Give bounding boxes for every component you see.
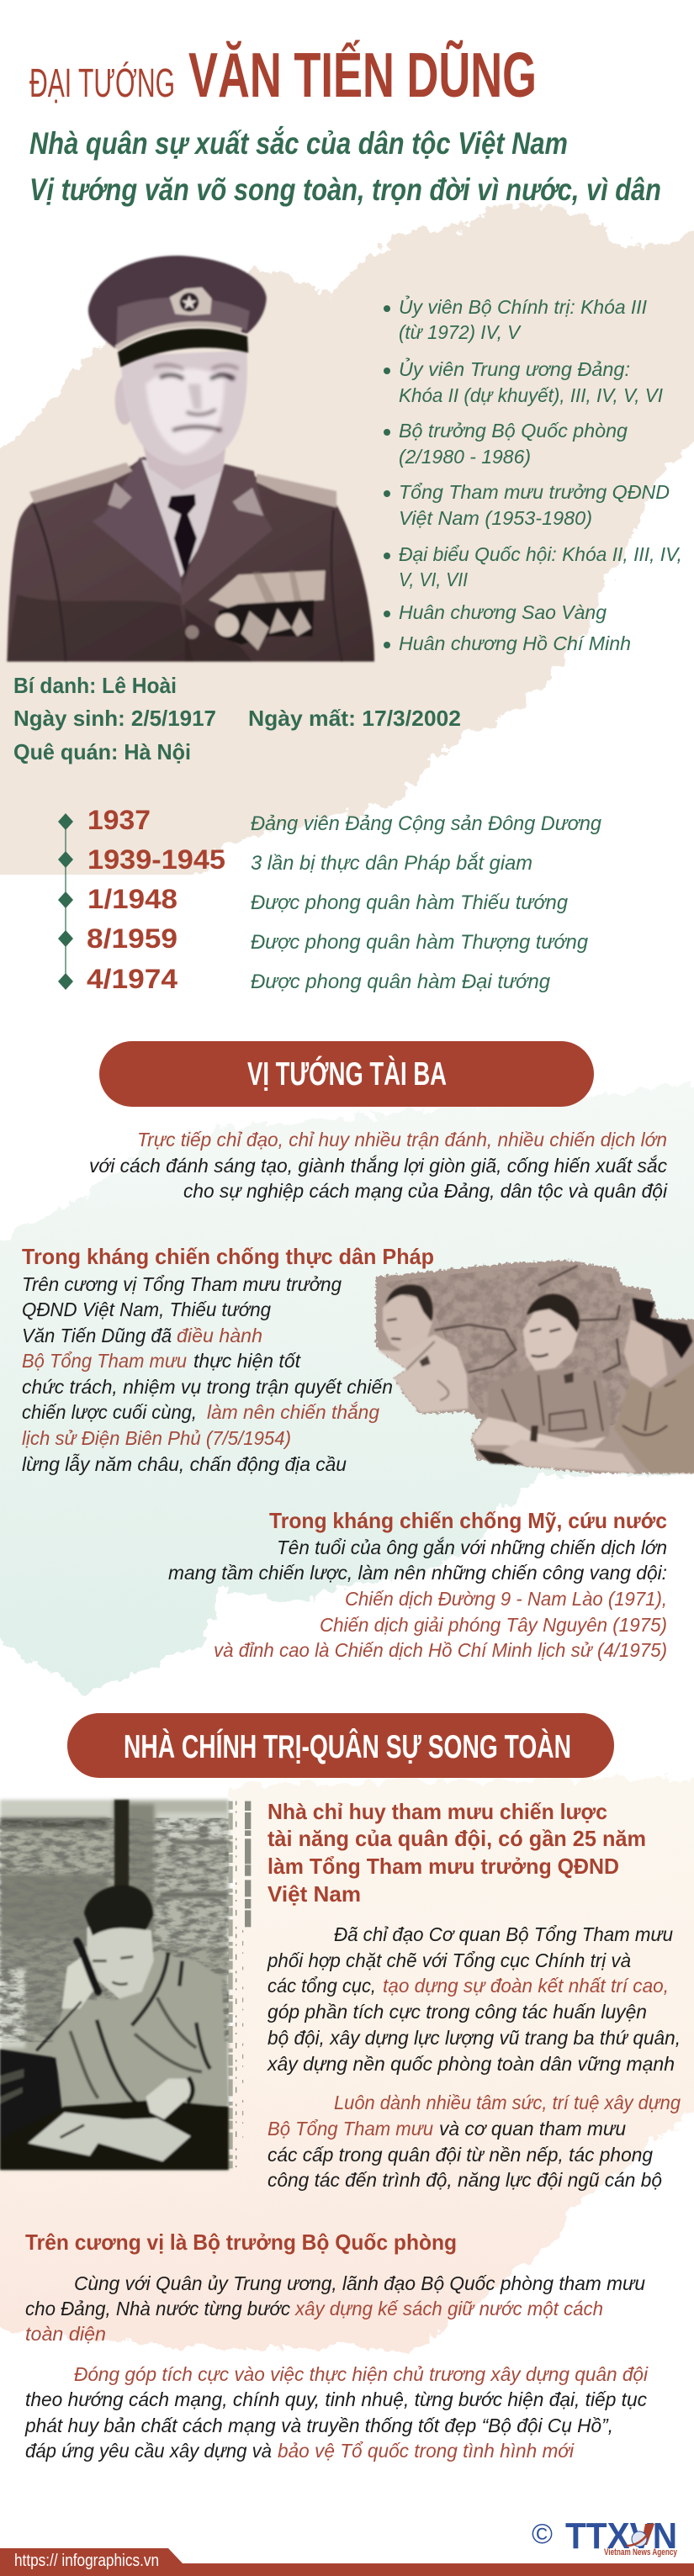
- medals: [219, 600, 314, 645]
- text block: resistance against the French: chức trách, nhiệm vụ trong trận quyết chiến: [22, 1376, 393, 1398]
- text block: Chief of General Staff: phối hợp chặt chẽ với Tổng cục Chính trị và: [267, 1949, 631, 1971]
- timeline item: 1/1948: [58, 884, 569, 914]
- map texture: [381, 1266, 650, 1426]
- personal information: Ngày mất: 17/3/2002: [248, 706, 461, 731]
- text block: Chief of General Staff: góp phần tích cực trong công tác huấn luyện: [268, 2001, 647, 2023]
- subtitle: [29, 125, 661, 207]
- writing hand: [146, 2079, 193, 2119]
- footer bar: [0, 2548, 694, 2576]
- intro paragraph: cho sự nghiệp cách mạng của Đảng, dân tộc và quân đội: [183, 1180, 668, 1202]
- text block: Minister of Defence: phát huy bản chất cách mạng và truyền thống tốt đẹp “Bộ đội Cụ Hồ”,: [24, 2415, 613, 2436]
- timeline item: 1939-1945: 1939-1945: [87, 844, 225, 875]
- timeline item: 1937: Đảng viên Đảng Cộng sản Đông Dương: [251, 812, 602, 835]
- bullet: Central Committee: [384, 357, 664, 406]
- lapels: [93, 457, 183, 595]
- text block: Minister of Defence: bảo vệ Tổ quốc trong tình hình mới: [278, 2440, 575, 2462]
- bullet: Chief of General Staff: Tổng Tham mưu trưởng QĐND: [399, 481, 670, 503]
- title: [29, 40, 537, 110]
- text block: Minister of Defence: cho Đảng, Nhà nước từng bước: [25, 2298, 290, 2319]
- text block: resistance against the US: Tên tuổi của ông gắn với những chiến dịch lớn: [277, 1537, 667, 1558]
- timeline item: 1/1948: Được phong quân hàm Thiếu tướng: [251, 891, 569, 914]
- text block: Chief of General Staff: tạo dựng sự đoàn kết nhất trí cao,: [383, 1975, 669, 1997]
- bullet: Ho Chi Minh Order: Huân chương Hồ Chí Minh: [399, 632, 631, 654]
- section banner: Vị tướng tài ba: VỊ TƯỚNG TÀI BA: [247, 1055, 447, 1092]
- text block: Chief of General Staff: các cấp trong quân đội từ nền nếp, tác phong: [268, 2144, 653, 2166]
- bullet: Minister of Defence: [384, 420, 628, 468]
- collar badges: [108, 482, 132, 509]
- bullet: Politburo: [384, 294, 648, 343]
- heading: Trên cương vị là Bộ trưởng Bộ Quốc phòng: Trên cương vị là Bộ trưởng Bộ Quốc phòng: [25, 2230, 457, 2255]
- photo: three officers in front of a map: [376, 1260, 694, 1473]
- shirt: [50, 1953, 228, 2109]
- officer in the middle: [471, 1294, 637, 1473]
- timeline item: 4/1974: [58, 964, 551, 994]
- timeline item: 8/1959: [58, 923, 589, 954]
- tie: [167, 495, 197, 576]
- bullet: Chief of General Staff: Việt Nam (1953-1980): [399, 507, 592, 529]
- text block: resistance against the US: [168, 1508, 667, 1661]
- text block: Chief of General Staff: các tổng cục,: [268, 1975, 376, 1997]
- shirt: [141, 460, 223, 578]
- text block: resistance against the French: lừng lẫy năm châu, chấn động địa cầu: [22, 1452, 347, 1475]
- heading: Nhà chỉ huy tham mưu chiến lược: Nhà chỉ huy tham mưu chiến lược: [268, 1799, 607, 1824]
- timeline item: 1937: 1937: [87, 805, 151, 835]
- text block: resistance against the French: làm nên chiến thắng: [207, 1401, 379, 1423]
- bullet: Politburo: Ủy viên Bộ Chính trị: Khóa III: [399, 294, 648, 318]
- text block: Chief of General Staff: Đã chỉ đạo Cơ quan Bộ Tổng Tham mưu: [334, 1923, 673, 1945]
- personal information: [13, 673, 461, 764]
- text block: resistance against the French: chiến lược cuối cùng,: [22, 1401, 197, 1423]
- cap rope: [116, 325, 241, 348]
- face: [122, 351, 247, 465]
- text block: Minister of Defence: xây dựng kế sách giữ nước một cách: [294, 2298, 603, 2319]
- timeline item: 1937: [58, 805, 602, 835]
- bullet: Chief of General Staff: [384, 481, 670, 529]
- heading: Trong kháng chiến chống Mỹ, cứu nước: Trong kháng chiến chống Mỹ, cứu nước: [269, 1508, 667, 1533]
- cap emblem: [170, 288, 212, 315]
- eyes, nose, mouth: [154, 365, 238, 369]
- text block: resistance against the US: Chiến dịch giải phóng Tây Nguyên (1975): [320, 1614, 667, 1636]
- text block: Minister of Defence: Cùng với Quân ủy Trung ương, lãnh đạo Bộ Quốc phòng tham mưu: [74, 2272, 645, 2294]
- intro paragraph: Trực tiếp chỉ đạo, chỉ huy nhiều trận đánh, nhiều chiến dịch lớn: [137, 1129, 667, 1150]
- bullet: National Assembly: Đại biểu Quốc hội: Khóa II, III, IV,: [399, 543, 682, 565]
- neck: [140, 435, 227, 490]
- logo: TTXVN Vietnam News Agency: TTXVN: [565, 2515, 677, 2557]
- bullet: National Assembly: [384, 543, 682, 590]
- text block: Chief of General Staff: và cơ quan tham mưu: [439, 2118, 626, 2140]
- timeline: [58, 805, 602, 994]
- medals ribbons: [209, 570, 326, 611]
- text block: resistance against the French: điều hành: [177, 1325, 262, 1346]
- text block: Minister of Defence: theo hướng cách mạng, chính quy, tinh nhuệ, từng bước hiện đại, tiếp tục: [25, 2388, 647, 2410]
- personal information: Quê quán: Hà Nội: [13, 739, 191, 764]
- papers: [28, 2113, 191, 2161]
- list of positions and awards: [384, 294, 682, 654]
- face: [87, 1924, 154, 1999]
- bullet: Minister of Defence: (2/1980 - 1986): [399, 446, 531, 468]
- intro paragraph: với cách đánh sáng tạo, giành thắng lợi giòn giã, cống hiến xuất sắc: [89, 1155, 667, 1177]
- bullet: Central Committee: Khóa II (dự khuyết), III, IV, V, VI: [399, 384, 664, 406]
- heading: Trong kháng chiến chống thực dân Pháp: Trong kháng chiến chống thực dân Pháp: [22, 1244, 434, 1269]
- cap crown: [88, 256, 267, 348]
- timeline item: 4/1974: Được phong quân hàm Đại tướng: [251, 971, 551, 993]
- background: green torn area: [0, 1079, 694, 1690]
- torn edge speckles: [230, 1801, 248, 2168]
- text block: resistance against the French: QĐND Việt Nam, Thiếu tướng: [22, 1299, 271, 1320]
- photo: general on the telephone at his desk: [0, 1800, 248, 2170]
- text block: resistance against the US: mang tầm chiến lược, làm nên những chiến công vang dội:: [168, 1562, 667, 1584]
- intro paragraph: [89, 1129, 668, 1202]
- timeline item: 1939-1945: [58, 844, 532, 875]
- hand and receiver: [61, 1955, 97, 2008]
- text block: resistance against the French: Văn Tiến Dũng đã: [22, 1325, 172, 1346]
- title: name: VĂN TIẾN DŨNG: [188, 40, 537, 110]
- desk: [0, 2100, 229, 2170]
- radio box: [0, 2050, 62, 2140]
- heading: Nhà chỉ huy tham mưu chiến lược: làm Tổng Tham mưu trưởng QĐND: [268, 1854, 619, 1879]
- heading: Nhà chỉ huy tham mưu chiến lược: Việt Nam: [268, 1881, 361, 1907]
- text block: Chief of General Staff: Luôn dành nhiều tâm sức, trí tuệ xây dựng: [334, 2092, 681, 2113]
- subtitle: Nhà quân sự xuất sắc của dân tộc Việt Nam: [29, 125, 568, 161]
- cap visor: [118, 329, 248, 368]
- text block: Chief of General Staff: [267, 1799, 681, 2191]
- text block: Chief of General Staff: Bộ Tổng Tham mưu: [268, 2118, 433, 2140]
- text block: Minister of Defence: [24, 2230, 649, 2462]
- text block: Chief of General Staff: xây dựng nền quốc phòng toàn dân vững mạnh: [267, 2053, 675, 2075]
- heading: Nhà chỉ huy tham mưu chiến lược: tài năng của quân đội, có gần 25 năm: [268, 1826, 646, 1851]
- timeline item: 8/1959: 8/1959: [87, 923, 177, 954]
- text block: resistance against the French: lịch sử Điện Biên Phủ (7/5/1954): [22, 1427, 291, 1449]
- section banner: Vị tướng tài ba: [99, 1041, 594, 1107]
- text block: resistance against the French: Trên cương vị Tổng Tham mưu trưởng: [22, 1273, 342, 1295]
- text block: resistance against the US: và đỉnh cao là Chiến dịch Hồ Chí Minh lịch sử (4/1975): [214, 1639, 667, 1661]
- ear: [115, 377, 135, 425]
- text block: Chief of General Staff: bộ đội, xây dựng lực lượng vũ trang ba thứ quân,: [268, 2027, 681, 2049]
- text block: resistance against the US: Chiến dịch Đường 9 - Nam Lào (1971),: [345, 1588, 667, 1610]
- officer on the left: [377, 1285, 469, 1413]
- hair: [84, 1886, 153, 1936]
- background: cream and peach torn area: [0, 1776, 694, 2349]
- bullet: Gold Star Order: Huân chương Sao Vàng: [399, 601, 607, 623]
- logo: TTXVN Vietnam News Agency: ©: [532, 2518, 553, 2549]
- text block: Minister of Defence: đáp ứng yêu cầu xây dựng và: [25, 2440, 272, 2462]
- section banner: Nhà chính trị-quân sự song toàn: [67, 1713, 614, 1778]
- text block: Minister of Defence: Đóng góp tích cực vào việc thực hiện chủ trương xây dựng quân đội: [74, 2363, 649, 2385]
- text block: Minister of Defence: toàn diện: [25, 2323, 106, 2345]
- officer on the right: [614, 1298, 694, 1473]
- timeline item: 4/1974: 4/1974: [87, 964, 177, 994]
- text block: resistance against the French: Bộ Tổng Tham mưu: [22, 1350, 187, 1372]
- bullet: Politburo: (từ 1972) IV, V: [399, 321, 522, 343]
- text block: resistance against the French: thực hiện tốt: [193, 1350, 302, 1372]
- bullet: National Assembly: V, VI, VII: [399, 569, 469, 590]
- timeline item: 1939-1945: 3 lần bị thực dân Pháp bắt giam: [251, 852, 532, 875]
- bullet: Minister of Defence: Bộ trưởng Bộ Quốc phòng: [399, 420, 628, 442]
- wall texture: [0, 1818, 229, 2042]
- heading: Nhà chỉ huy tham mưu chiến lược: [268, 1799, 646, 1907]
- text block: resistance against the French: [22, 1244, 434, 1475]
- personal information: Ngày sinh: 2/5/1917: [13, 706, 216, 731]
- background: beige torn area: [0, 206, 694, 891]
- portrait photo of General Van Tien Dung: [7, 256, 374, 662]
- title: rank: ĐẠI TƯỚNG: [29, 61, 175, 106]
- timeline item: 8/1959: Được phong quân hàm Thượng tướng: [251, 931, 589, 954]
- text block: Chief of General Staff: công tác đến trình độ, năng lực đội ngũ cán bộ: [268, 2169, 662, 2191]
- bullet: Central Committee: Ủy viên Trung ương Đảng:: [399, 357, 630, 380]
- timeline item: 1/1948: 1/1948: [87, 884, 177, 914]
- footer bar: https:// infographics.vn: [14, 2552, 159, 2570]
- personal information: Bí danh: Lê Hoài: [13, 673, 177, 698]
- epaulettes: [29, 463, 132, 503]
